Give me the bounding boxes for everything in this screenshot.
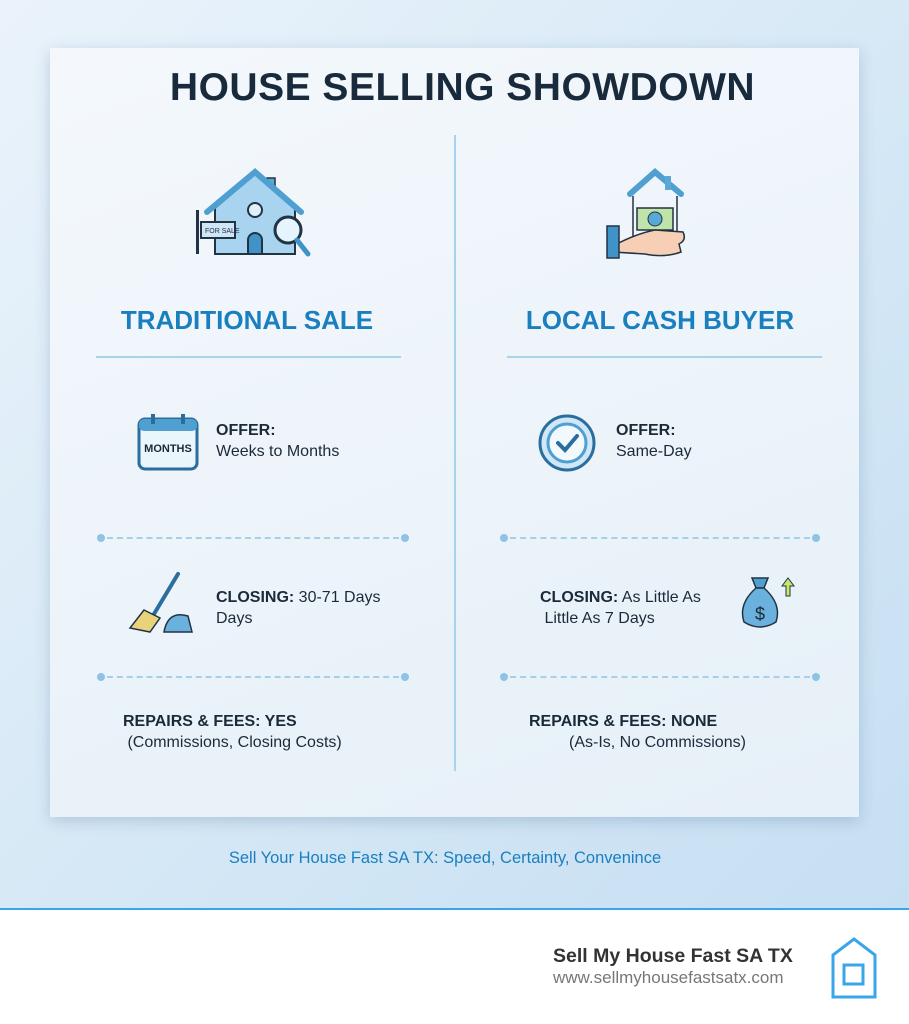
heading: traditional sale: TRADITIONAL SALE (121, 305, 373, 335)
icon: hand with cash (606, 168, 686, 259)
text: repairs traditional (123, 713, 342, 751)
text: repairs cash (529, 713, 746, 751)
icon: logo house (832, 937, 876, 998)
text: closing cash: Little As 7 Days (544, 610, 655, 627)
brand url: www.sellmyhousefastsatx.com (553, 968, 784, 987)
icon: money bag (742, 577, 795, 628)
title: HOUSE SELLING SHOWDOWN (170, 66, 755, 109)
tagline: Sell Your House Fast SA TX: Speed, Certainty, Convenince (229, 849, 661, 867)
text: offer traditional: Weeks to Months (216, 443, 339, 460)
text: offer cash: Same-Day (616, 443, 692, 460)
text: offer cash: OFFER: (616, 422, 676, 439)
text: repairs cash: (As-Is, No Commissions) (569, 734, 746, 751)
icon: clock check (538, 414, 596, 472)
vertical divider (454, 135, 456, 771)
text: repairs traditional: (Commissions, Closing Costs) (127, 734, 342, 751)
text: repairs traditional: REPAIRS & FEES: YES (123, 713, 297, 730)
icon: house for sale (196, 168, 310, 256)
text: offer cash (616, 422, 692, 460)
text: closing traditional: CLOSING: 30-71 Days (216, 589, 380, 606)
text: repairs cash: REPAIRS & FEES: NONE (529, 713, 717, 730)
text: closing traditional (216, 589, 380, 627)
text: offer traditional: OFFER: (216, 422, 276, 439)
icon: house for sale: FOR SALE (205, 228, 240, 235)
text: closing traditional: Days (216, 610, 252, 627)
icon: money bag: $ (755, 604, 765, 624)
panel: main card (50, 48, 859, 817)
icon: calendar: MONTHS (144, 443, 192, 455)
icon: broom and dustpan (128, 572, 193, 633)
text: closing cash: CLOSING: As Little As (540, 589, 701, 606)
text: offer traditional (216, 422, 339, 460)
text: closing cash (540, 589, 701, 627)
footer band (0, 908, 909, 1024)
brand name: Sell My House Fast SA TX (553, 945, 793, 967)
heading: local cash buyer: LOCAL CASH BUYER (526, 305, 794, 335)
dividers (97, 534, 105, 542)
icon: calendar (138, 414, 198, 470)
